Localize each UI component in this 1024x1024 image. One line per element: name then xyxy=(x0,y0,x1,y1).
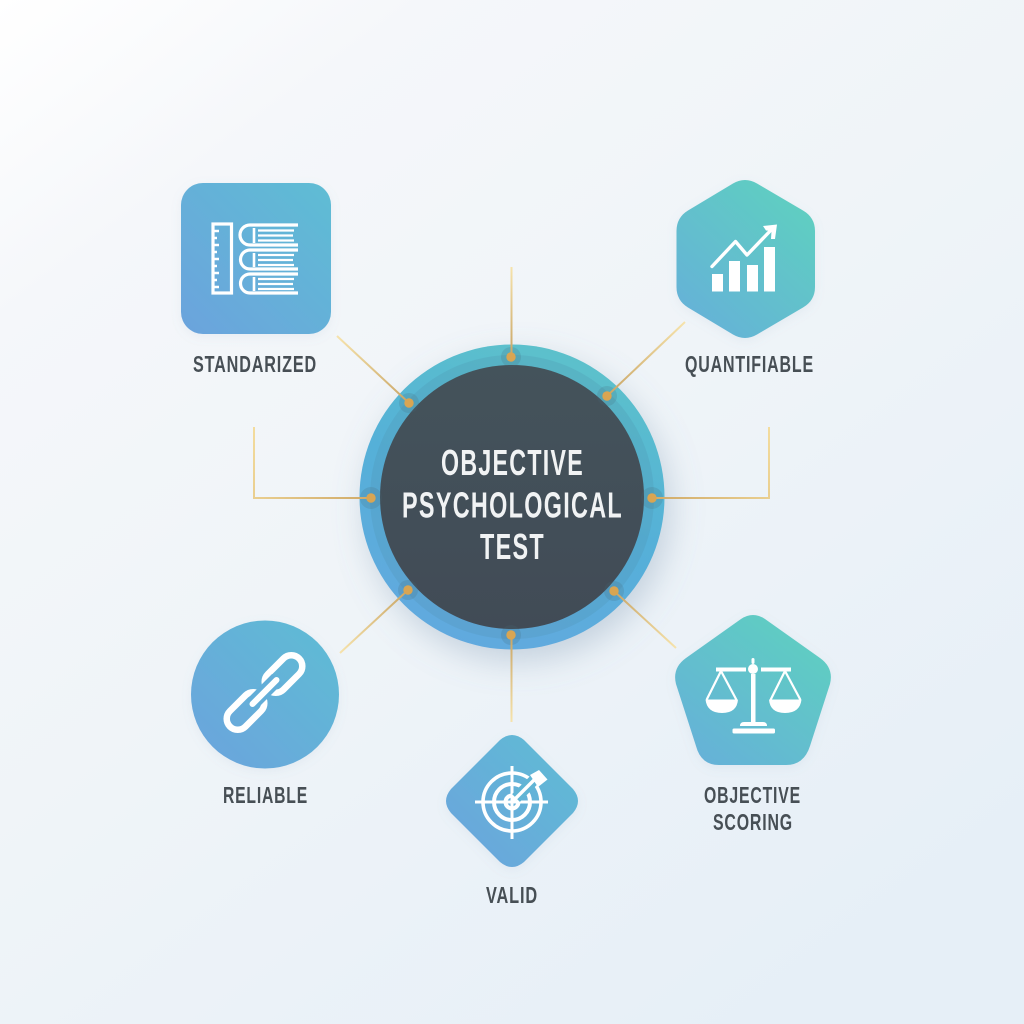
label: STANDARIZED xyxy=(193,351,317,377)
label: VALID xyxy=(486,882,538,908)
hub title xyxy=(402,442,623,567)
label xyxy=(704,782,801,835)
icon: target with arrow xyxy=(475,766,548,839)
hub dark disc xyxy=(380,365,644,629)
hub title: TEST xyxy=(480,526,545,567)
diamond badge xyxy=(446,735,578,867)
panel: objective scoring xyxy=(675,615,831,835)
central hub xyxy=(254,267,769,722)
label: RELIABLE xyxy=(223,782,308,808)
hub node halos xyxy=(360,347,663,645)
pentagon badge xyxy=(675,615,831,765)
hub outer ring xyxy=(360,344,664,650)
panel: standardized xyxy=(181,183,331,377)
icon: ruler and books xyxy=(213,224,298,293)
rounded square badge xyxy=(181,183,331,334)
icon: chain links xyxy=(222,651,307,734)
hub title: OBJECTIVE xyxy=(441,442,584,483)
hub title: PSYCHOLOGICAL xyxy=(402,484,623,526)
label: SCORING xyxy=(713,809,793,835)
hub connector nodes xyxy=(366,352,657,640)
panel: valid xyxy=(446,735,578,908)
label: QUANTIFIABLE xyxy=(685,351,814,377)
panel: quantifiable xyxy=(676,180,815,377)
label: OBJECTIVE xyxy=(704,782,801,808)
hub inner ring xyxy=(370,355,654,639)
circle badge xyxy=(191,620,339,768)
icon: balance scale xyxy=(706,658,802,734)
hexagon badge xyxy=(676,180,815,338)
connector lines xyxy=(254,267,769,722)
icon: rising bar chart xyxy=(712,224,777,292)
panel: reliable xyxy=(191,620,339,808)
